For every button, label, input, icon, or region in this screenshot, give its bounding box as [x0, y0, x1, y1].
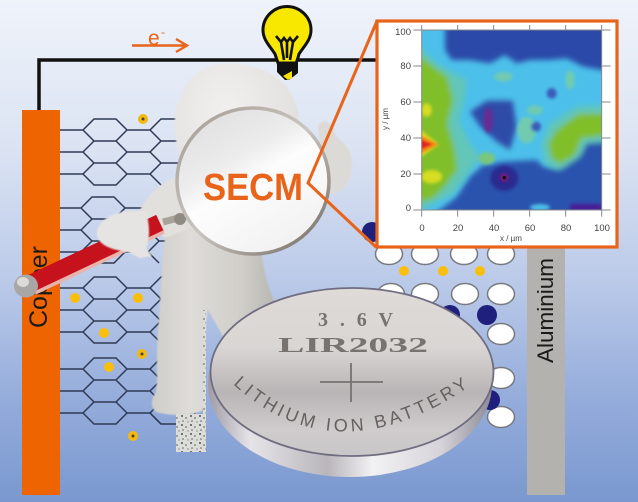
- copper current collector: [22, 110, 60, 495]
- curved label: LITHIUM ION BATTERY: [234, 376, 464, 432]
- battery rim: [208, 291, 492, 477]
- electron arrow: e: [148, 27, 160, 50]
- y axis labels: 0: [406, 203, 411, 214]
- x axis labels: 100: [594, 223, 610, 234]
- y axis labels: 100: [395, 27, 411, 38]
- figure: body: [152, 200, 280, 415]
- icon: light bulb: [263, 6, 311, 80]
- figure with magnifying glass: [14, 64, 352, 452]
- voltage text: 3.6V: [318, 309, 394, 331]
- plus sign: [320, 363, 383, 402]
- figure: upper arm: [138, 176, 196, 238]
- lithium ions: [70, 114, 485, 441]
- model text: LIR2032: [278, 333, 428, 357]
- x axis labels: 60: [525, 223, 535, 234]
- figure: right hand: [318, 121, 352, 194]
- x axis labels: [419, 223, 610, 234]
- aluminium current collector: [527, 247, 565, 495]
- electron arrow: [132, 25, 187, 52]
- figure: head: [175, 64, 300, 220]
- y axis labels: 80: [400, 61, 411, 72]
- x axis labels: 40: [489, 223, 499, 234]
- aluminium current collector: Aluminium: [533, 258, 558, 363]
- y axis labels: 40: [400, 133, 411, 144]
- cathode particles: [362, 222, 514, 428]
- battery face: [210, 288, 494, 456]
- heat map: [413, 23, 611, 217]
- callout lines from lens to map: [308, 21, 377, 247]
- coin cell battery: [208, 287, 494, 477]
- x axis labels: 0: [419, 223, 425, 234]
- circuit wire: [39, 60, 380, 110]
- graphene anode layers: [58, 119, 196, 424]
- y axis labels: 20: [400, 169, 411, 180]
- magnifier lens: [177, 108, 329, 254]
- electron arrow: -: [161, 25, 165, 39]
- y axis labels: [395, 27, 411, 214]
- y axis labels: 60: [400, 97, 411, 108]
- y axis title: y / µm: [381, 108, 390, 130]
- SECM label: SECM: [203, 167, 303, 209]
- x axis labels: 20: [453, 223, 463, 234]
- copper current collector: Copper: [25, 246, 53, 328]
- magnifier handle: [14, 213, 186, 298]
- x axis title: x / µm: [500, 234, 522, 243]
- x axis labels: 80: [561, 223, 571, 234]
- SECM map panel: [377, 21, 617, 247]
- probe: speckled electrode: [176, 310, 206, 452]
- figure: hand gripping handle: [97, 211, 152, 258]
